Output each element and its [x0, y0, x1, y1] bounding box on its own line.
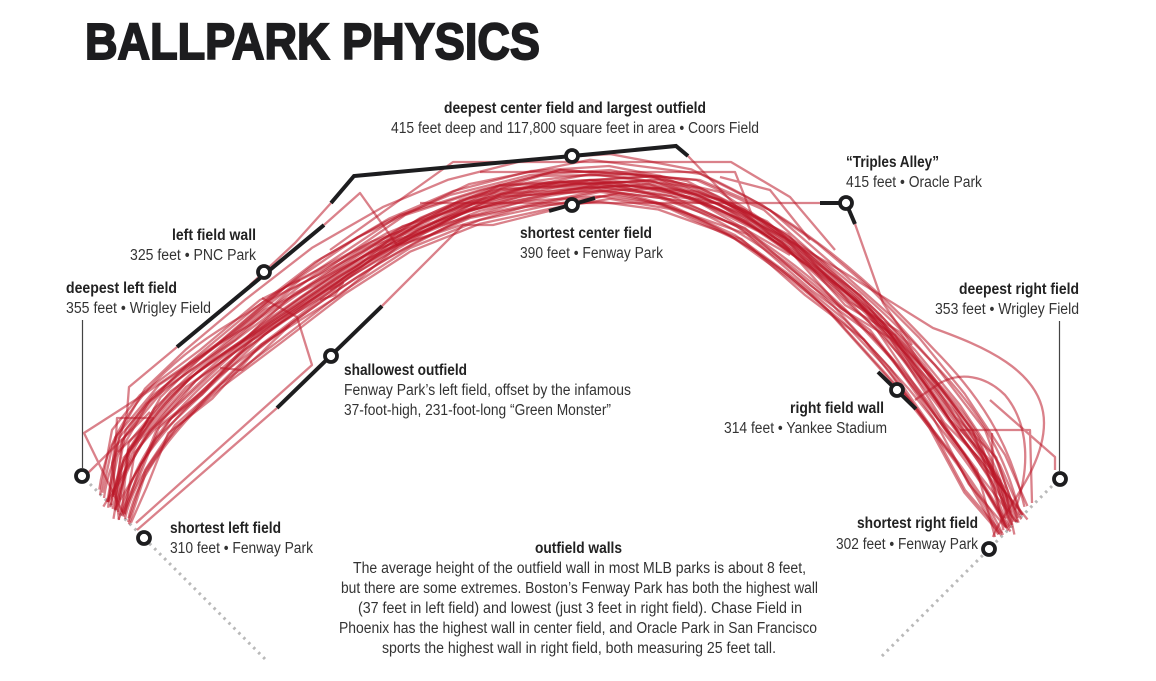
label: deepest center field — [391, 100, 759, 137]
label: shortest right field: shortest right field — [857, 515, 978, 532]
label: deepest right field: 353 feet • Wrigley Field — [935, 301, 1079, 318]
chart: overlaid outfield walls — [84, 154, 1055, 537]
text block: outfield walls: sports the highest wall in right field, both measuring 25 feet tall. — [382, 640, 776, 657]
label: shortest right field: 302 feet • Fenway Park — [836, 536, 978, 553]
label: shortest center field — [520, 225, 663, 262]
foul lines — [90, 484, 1052, 659]
text block: outfield walls: but there are some extremes. Boston’s Fenway Park has both the highest wall — [341, 580, 818, 597]
label: shortest left field: shortest left field — [170, 520, 281, 537]
label: shortest left field: 310 feet • Fenway Park — [170, 540, 313, 557]
label: shortest center field: 390 feet • Fenway Park — [520, 245, 663, 262]
outlier: PNC Park wall — [112, 193, 470, 520]
marker: left field wall — [177, 225, 324, 347]
outlier: Wrigley Field left — [84, 280, 300, 513]
outlier: notched left wall — [136, 283, 343, 523]
text block: outfield walls: (37 feet in left field) and lowest (just 3 feet in right field). Chase Field in — [358, 600, 802, 617]
marker: deepest left field — [76, 320, 88, 482]
label: right field wall: right field wall — [790, 400, 884, 417]
label: left field wall — [130, 227, 256, 264]
label: deepest right field: deepest right field — [959, 281, 1079, 298]
label: deepest left field: deepest left field — [66, 280, 177, 297]
outlier: right curved wall — [915, 377, 1025, 537]
outlier: left-center corner — [250, 156, 790, 285]
text block: outfield walls: outfield walls — [535, 540, 622, 557]
label: Triples Alley: “Triples Alley” — [846, 154, 939, 171]
marker: Triples Alley — [820, 197, 855, 224]
marker: shortest left field — [138, 532, 150, 544]
label: Triples Alley — [846, 154, 982, 191]
label: shortest left field — [170, 520, 313, 557]
outlier: Triples Alley — [420, 203, 912, 345]
label: shallowest outfield: shallowest outfield — [344, 362, 467, 379]
outlier: right box — [960, 400, 1055, 503]
label: left field wall: 325 feet • PNC Park — [130, 247, 256, 264]
label: deepest right field — [935, 281, 1079, 318]
marker: shortest center field — [549, 198, 595, 211]
label: right field wall — [724, 400, 887, 437]
marker: shortest right field — [983, 543, 995, 555]
label: left field wall: left field wall — [172, 227, 256, 244]
text block: outfield walls: Phoenix has the highest wall in center field, and Oracle Park in San Francisco — [339, 620, 817, 637]
label: Triples Alley: 415 feet • Oracle Park — [846, 174, 982, 191]
label: deepest center field: deepest center field and largest outfield — [444, 100, 706, 117]
label: deepest left field — [66, 280, 211, 317]
label: deepest center field: 415 feet deep and 117,800 square feet in area • Coors Field — [391, 120, 759, 137]
marker: deepest right field — [1054, 321, 1066, 485]
text block: outfield walls — [339, 540, 818, 657]
label: deepest left field: 355 feet • Wrigley Field — [66, 300, 211, 317]
label: shallowest outfield: Fenway Park’s left field, offset by the infamous — [344, 382, 631, 399]
label: shortest right field — [836, 515, 978, 553]
label: shortest center field: shortest center field — [520, 225, 652, 242]
outlier: Fenway Park wall — [137, 193, 790, 530]
outlier: corner box — [113, 418, 153, 497]
label: shallowest outfield: 37-foot-high, 231-foot-long “Green Monster” — [344, 402, 611, 419]
title: BALLPARK PHYSICS — [85, 13, 540, 70]
label: right field wall: 314 feet • Yankee Stadium — [724, 420, 887, 437]
label: shallowest outfield — [344, 362, 631, 419]
outlier: flat center walls — [330, 162, 835, 250]
marker: deepest center field — [331, 146, 688, 203]
marker: right field wall — [878, 372, 916, 409]
outlier: round right corner — [720, 200, 1044, 537]
text block: outfield walls: The average height of the outfield wall in most MLB parks is about 8 feet, — [353, 560, 806, 577]
marker: shallowest outfield — [277, 306, 382, 408]
